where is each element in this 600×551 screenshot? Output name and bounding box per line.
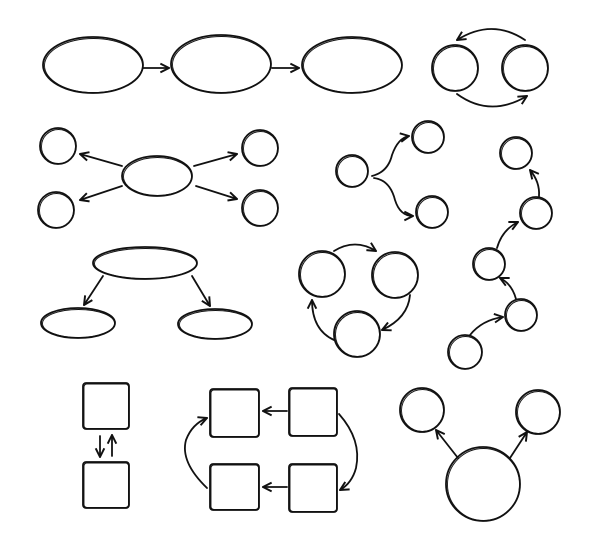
diagram: central ellipse with four circles	[38, 128, 278, 228]
diagram: ellipse chain	[43, 35, 402, 93]
diagram: branching circles	[336, 121, 448, 228]
diagram: two squares	[83, 383, 129, 508]
diagram: four square cycle	[185, 388, 357, 512]
diagram: tree of ellipses	[41, 247, 252, 339]
diagram: two circle cycle	[432, 29, 548, 107]
diagram: big circle with two circles	[400, 388, 560, 521]
diagram: three circle cycle	[299, 244, 418, 357]
diagram: circle chain	[448, 137, 552, 369]
